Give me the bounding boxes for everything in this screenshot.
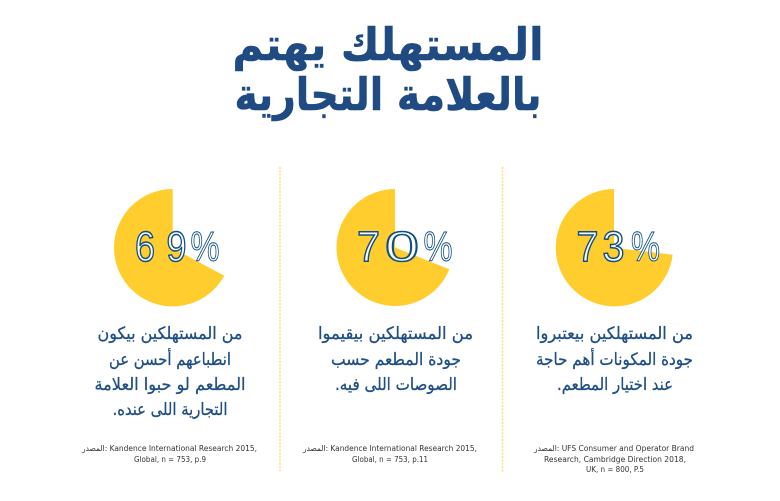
- number: 70%: 0: [385, 223, 419, 271]
- pie chart: 70%: [337, 189, 449, 306]
- title: المستهلك يهتم: [232, 18, 544, 71]
- panel: 69%: [81, 189, 257, 464]
- text: 70% description: من المستهلكين بيقيموا: [318, 324, 473, 344]
- text: 69% description: التجارية اللى عنده.: [112, 400, 228, 420]
- number: 69%: 6: [135, 223, 155, 271]
- text: 73% description: جودة المكونات أهم حاجة: [536, 348, 693, 370]
- source: 69%: [81, 444, 257, 464]
- source: 73%: [533, 444, 694, 474]
- source: 69%: المصدر: Kandence International Research 2015,: [81, 444, 257, 453]
- source: 69%: Global, n = 753, p.9: [134, 455, 206, 464]
- source: 73%: المصدر: UFS Consumer and Operator Brand: [533, 444, 694, 453]
- panel: 73%: [533, 189, 694, 474]
- panel: 70%: [302, 189, 477, 464]
- text: 69% description: من المستهلكين بيكون: [98, 324, 242, 344]
- text: 73% description: من المستهلكين بيعتبروا: [536, 324, 693, 344]
- pie chart: 69%: [114, 189, 224, 306]
- text: 70% description: [318, 324, 473, 395]
- source: 73%: Research, Cambridge Direction 2018,: [544, 455, 686, 464]
- number: 69%: 9: [166, 223, 186, 271]
- source: 73%: UK, n = 800, P.5: [586, 465, 644, 474]
- number: 69%: [135, 223, 220, 271]
- number: 73%: 3: [602, 223, 624, 271]
- number: 70%: [357, 223, 452, 271]
- text: 69% description: [94, 324, 246, 420]
- title: [232, 18, 544, 121]
- text: 69% description: المطعم لو حبوا العلامة: [94, 375, 246, 395]
- number: 73%: 7: [576, 223, 598, 271]
- number: 69%: %: [190, 223, 220, 270]
- number: 73%: [576, 223, 660, 271]
- title: بالعلامة التجارية: [234, 68, 542, 121]
- number: 70%: 7: [357, 223, 380, 271]
- number: 70%: %: [424, 223, 452, 270]
- source: 70%: [302, 444, 477, 464]
- text: 70% description: جودة المطعم حسب: [331, 350, 461, 370]
- text: 73% description: عند اختيار المطعم.: [557, 375, 673, 395]
- text: 69% description: انطباعهم أحسن عن: [109, 348, 231, 370]
- source: 70%: Global, n = 753, p.11: [352, 455, 428, 464]
- pie chart: 73%: [556, 189, 673, 306]
- source: 70%: المصدر: Kandence International Research 2015,: [302, 444, 477, 453]
- text: 70% description: الصوصات اللى فيه.: [335, 375, 457, 395]
- number: 73%: %: [631, 223, 660, 270]
- text: 73% description: [536, 324, 693, 395]
